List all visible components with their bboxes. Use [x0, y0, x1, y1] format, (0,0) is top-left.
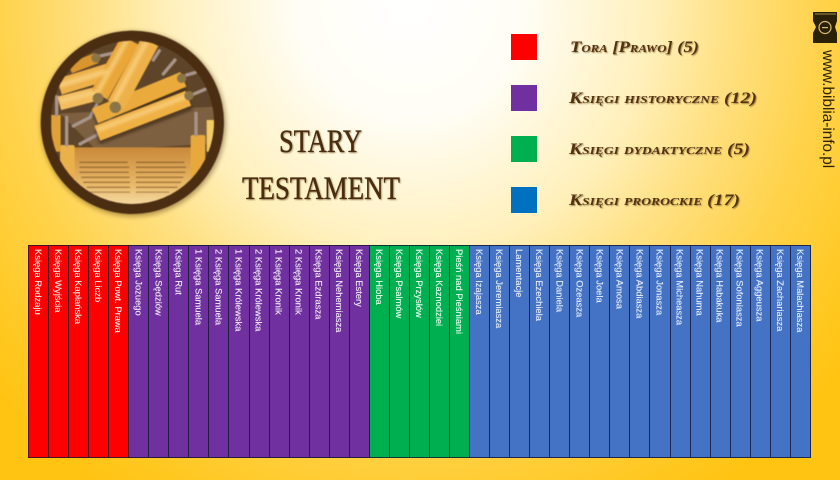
book: Księga Rodzaju	[28, 245, 49, 458]
lower parchment page	[74, 146, 192, 205]
book: Lamentacje: Lamentacje	[514, 249, 525, 297]
book: Księga Sędziów: Księga Sędziów	[153, 249, 164, 316]
book: Księga Malachiasza: Księga Malachiasza	[795, 249, 806, 332]
book: 1 Księga Kronik: 1 Księga Kronik	[274, 249, 285, 315]
book: Księga Amosa	[610, 245, 630, 458]
book: Księga Kaznodziei	[430, 245, 450, 458]
legend labels: Księgi historyczne (12)	[568, 90, 757, 107]
book: Księga Ezechiela: Księga Ezechiela	[534, 249, 545, 321]
book: Księga Nahuma	[691, 245, 711, 458]
book: Księga Ozeasza: Księga Ozeasza	[574, 249, 585, 317]
book: Księga Micheasza	[670, 245, 691, 458]
legend labels: Księgi dydaktyczne (5)	[569, 142, 751, 159]
book: 1 Księga Kronik	[270, 245, 290, 458]
legend labels: Księgi prorockie (17)	[568, 192, 740, 209]
book: Księga Amosa: Księga Amosa	[614, 249, 625, 309]
legend swatch: purple	[511, 85, 537, 111]
book: Księga Nehemiasza	[330, 245, 350, 458]
book: Księga Jeremiasza: Księga Jeremiasza	[494, 249, 505, 328]
book: 2 Księga Królewska: 2 Księga Królewska	[254, 249, 265, 331]
book: Księga Joela: Księga Joela	[594, 249, 605, 303]
book: Księga Liczb	[89, 245, 109, 458]
website url: www.biblia-info.pl	[819, 50, 836, 168]
book: Księga Ezdrasza	[310, 245, 330, 458]
book: 1 Księga Królewska: 1 Księga Królewska	[234, 249, 245, 331]
book: Księga Habakuka: Księga Habakuka	[715, 249, 726, 322]
book: 2 Księga Samuela	[209, 245, 229, 458]
book: Księga Habakuka	[711, 245, 731, 458]
legend	[511, 34, 758, 213]
legend labels: Tora [Prawo] (5)	[570, 39, 699, 56]
icon: book logo	[813, 12, 837, 43]
legend labels: Tora [Prawo] (5)	[571, 40, 700, 57]
book: Księga Aggeusza: Księga Aggeusza	[755, 249, 766, 321]
book: Księga Jozuego	[129, 245, 149, 458]
book: Pieśń nad Pieśniami	[450, 245, 470, 458]
book: Księga Zachariasza	[771, 245, 791, 458]
book: Księga Abdiasza	[630, 245, 650, 458]
book: Księga Hioba	[370, 245, 390, 458]
book: Księga Jeremiasza	[490, 245, 510, 458]
book: Księga Ezechiela	[530, 245, 550, 458]
book: Księga Sofoniasza: Księga Sofoniasza	[735, 249, 746, 327]
book: 2 Księga Królewska	[250, 245, 270, 458]
title: STARY	[279, 124, 362, 160]
legend labels: Księgi dydaktyczne (5)	[568, 141, 750, 158]
book: Pieśń nad Pieśniami: Pieśń nad Pieśniami	[454, 249, 465, 334]
book: 2 Księga Samuela: 2 Księga Samuela	[213, 249, 224, 325]
legend swatch: red	[511, 34, 537, 60]
book: Księga Rut: Księga Rut	[173, 249, 184, 295]
book: Księga Jonasza: Księga Jonasza	[654, 249, 666, 315]
book: Księga Micheasza: Księga Micheasza	[675, 249, 686, 325]
title	[242, 124, 402, 208]
book: Księga Aggeusza	[751, 245, 771, 458]
book: Lamentacje	[510, 245, 530, 458]
book table	[28, 245, 811, 458]
legend labels: Księgi historyczne (12)	[569, 91, 758, 108]
book: Księga Abdiasza: Księga Abdiasza	[634, 249, 645, 318]
legend swatch: green	[511, 136, 537, 162]
book: 1 Księga Samuela: 1 Księga Samuela	[193, 249, 204, 325]
book: Księga Jonasza	[650, 245, 670, 458]
book: 2 Księga Kronik: 2 Księga Kronik	[294, 249, 305, 315]
book: Księga Powt. Prawa: Księga Powt. Prawa	[113, 249, 124, 333]
book: Księga Nehemiasza: Księga Nehemiasza	[334, 249, 345, 332]
book: Księga Przysłów	[410, 245, 430, 458]
book: 1 Księga Samuela	[189, 245, 209, 458]
legend labels	[568, 39, 758, 210]
book: Księga Liczb: Księga Liczb	[93, 249, 104, 302]
book: Księga Wyjścia: Księga Wyjścia	[53, 249, 64, 312]
book: Księga Daniela: Księga Daniela	[554, 249, 565, 312]
book: Księga Kapłańska	[69, 245, 89, 458]
book: Księga Psalmów	[390, 245, 410, 458]
book: Księga Izajasza: Księga Izajasza	[474, 249, 485, 315]
book: Księga Powt. Prawa	[109, 245, 129, 458]
book: Księga Ezdrasza: Księga Ezdrasza	[314, 249, 325, 319]
book: Księga Izajasza	[470, 245, 490, 458]
legend labels: Księgi prorockie (17)	[569, 193, 741, 210]
book: Księga Rodzaju: Księga Rodzaju	[33, 249, 44, 315]
book: Księga Kaznodziei: Księga Kaznodziei	[434, 249, 445, 326]
book: Księga Joela	[590, 245, 610, 458]
book: Księga Kapłańska: Księga Kapłańska	[73, 249, 84, 324]
book: Księga Ozeasza	[570, 245, 590, 458]
book: Księga Rut	[169, 245, 189, 458]
book: Księga Estery: Księga Estery	[354, 249, 365, 307]
illustration: scrolls in round brown frame	[38, 28, 229, 220]
book: Księga Malachiasza	[791, 245, 811, 458]
legend swatch: blue	[511, 187, 537, 213]
book: 1 Księga Królewska	[229, 245, 250, 458]
book: Księga Przysłów: Księga Przysłów	[414, 249, 425, 318]
book: Księga Estery	[350, 245, 370, 458]
book: 2 Księga Kronik	[290, 245, 310, 458]
book: Księga Psalmów: Księga Psalmów	[394, 249, 405, 318]
page rollers	[60, 145, 75, 188]
book: Księga Sędziów	[149, 245, 169, 458]
book: Księga Nahuma: Księga Nahuma	[695, 249, 706, 316]
book: Księga Jozuego: Księga Jozuego	[133, 249, 144, 316]
book: Księga Hioba: Księga Hioba	[374, 249, 385, 305]
book: Księga Wyjścia	[49, 245, 69, 458]
scrolls	[97, 103, 190, 137]
book: Księga Daniela	[550, 245, 570, 458]
title: STARY	[280, 125, 363, 161]
book: Księga Sofoniasza	[731, 245, 751, 458]
book: Księga Zachariasza: Księga Zachariasza	[775, 249, 786, 331]
